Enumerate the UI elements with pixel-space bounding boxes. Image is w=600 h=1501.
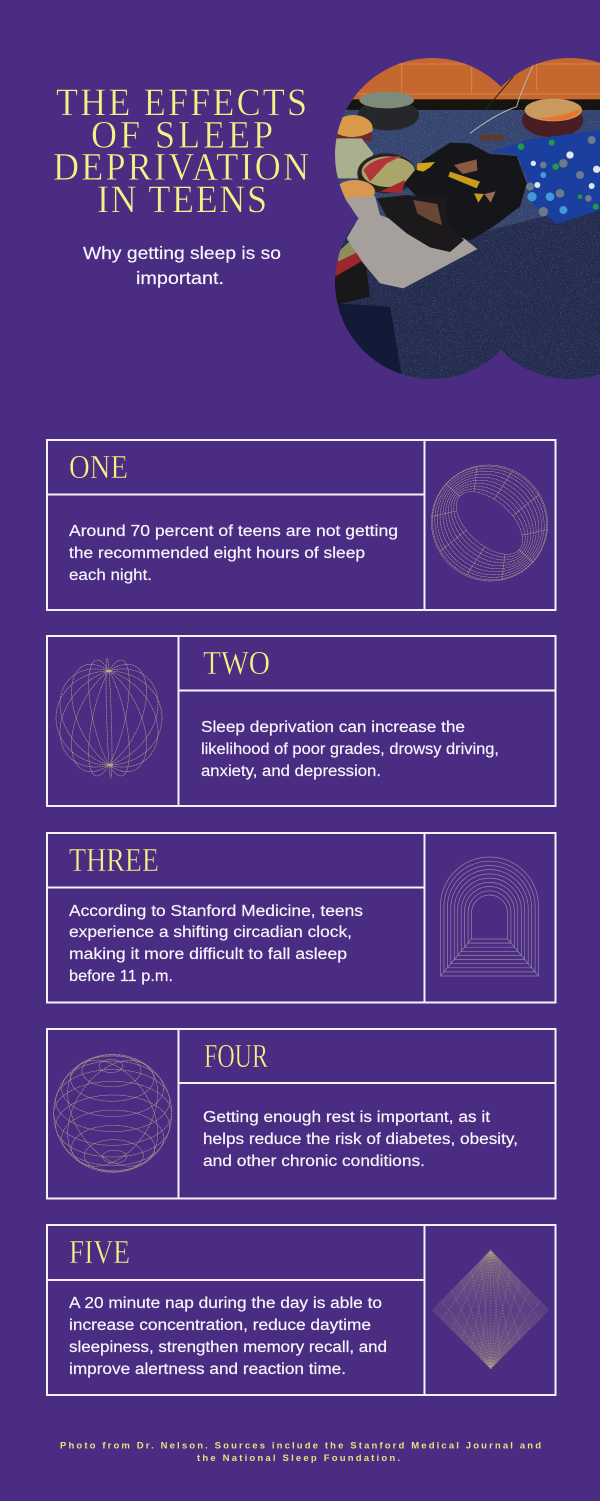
carpet [330,110,600,390]
pillow [345,196,477,288]
title: OF SLEEP [91,113,273,157]
text: fact five: A 20 minute nap during the day is able to [69,1295,382,1312]
text: fact three: experience a shifting circadian clock, [69,924,352,941]
heading: five: FIVE [69,1234,130,1271]
sweatshirt print and hands [417,159,496,203]
text: fact two: Sleep deprivation can increase the [201,719,465,736]
text: fact three: According to Stanford Medicine, teens [69,903,363,920]
title: THE EFFECTS [56,80,307,124]
text: fact one: each night. [69,567,152,584]
blanket [490,130,600,224]
footer credits [60,1440,541,1464]
hair [377,195,464,252]
text: fact three: making it more difficult to fall asleep [69,946,347,963]
heading: one: ONE [69,449,128,486]
text: fact four [203,1109,518,1170]
icon: wireframe globe with meridians [56,634,162,802]
photo: teen sleeping on carpet [330,50,600,390]
title: DEPRIVATION [53,145,309,189]
subtitle [83,243,281,288]
text: fact four: and other chronic conditions. [203,1153,425,1170]
text: fact one [69,523,398,584]
icon: wireframe torus [408,441,571,605]
panel: three [47,833,556,1002]
text: fact four: Getting enough rest is important, as it [203,1109,491,1126]
panel: five [47,1225,556,1395]
floor cushions [330,65,583,305]
panel: four [47,1029,556,1198]
title: IN TEENS [97,177,267,221]
text: fact five: sleepiness, strengthen memory recall, and [69,1339,387,1356]
sweatshirt [404,143,527,241]
text: fact one: the recommended eight hours of sleep [69,545,365,562]
text: fact five: increase concentration, reduce daytime [69,1317,371,1334]
text: fact five [69,1295,387,1378]
heading: three: THREE [69,842,159,879]
text: fact two: anxiety, and depression. [201,763,381,780]
panel frame [47,833,556,1002]
panel frame [47,440,556,610]
subtitle: important. [136,268,224,288]
title [53,80,309,221]
icon: dotted diamond [432,1250,549,1369]
panel: one [47,440,571,610]
heading: four: FOUR [204,1038,268,1075]
subtitle: Why getting sleep is so [83,243,281,263]
text: fact one: Around 70 percent of teens are not getting [69,523,398,540]
text: fact three [69,903,363,985]
icon: wireframe tunnel [440,857,538,976]
panel frame [47,1225,556,1395]
icon: wireframe sphere [54,1044,172,1182]
panel frame [47,636,556,806]
footer credits: Photo from Dr. Nelson. Sources include the Stanford Medical Journal and [60,1440,541,1452]
text: fact five: improve alertness and reaction time. [69,1361,346,1378]
text: fact two: likelihood of poor grades, drowsy driving, [201,741,499,758]
face [413,200,442,225]
panel frame [47,1029,556,1198]
orange wall [346,58,600,110]
text: fact three: before 11 p.m. [69,968,173,985]
panel: two [47,634,556,806]
text: fact two [201,719,499,780]
text: fact four: helps reduce the risk of diabetes, obesity, [203,1131,518,1148]
footer credits: the National Sleep Foundation. [197,1453,400,1464]
heading: two: TWO [203,645,270,682]
